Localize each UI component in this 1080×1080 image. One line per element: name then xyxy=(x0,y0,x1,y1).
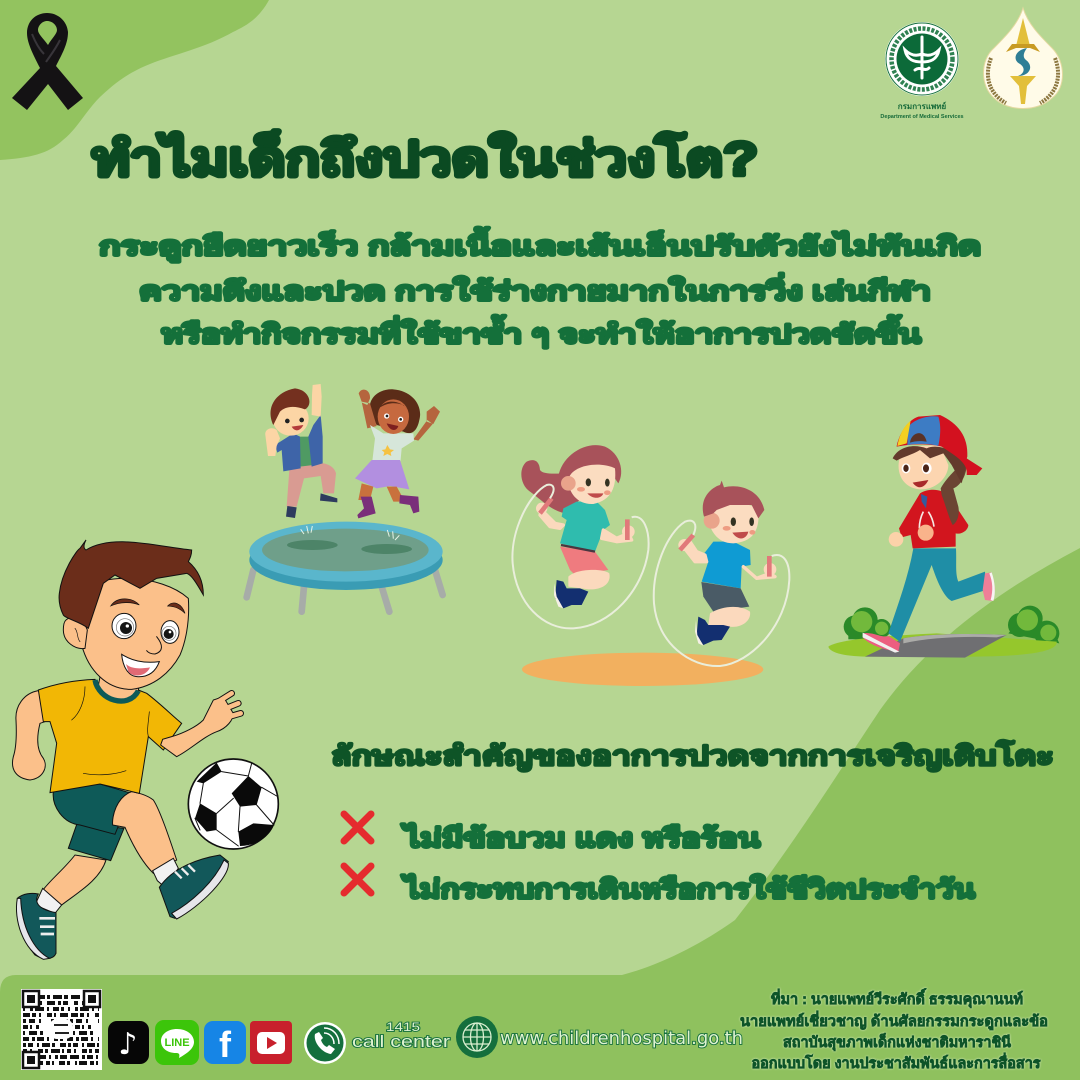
panel: hill and footer band xyxy=(0,548,1080,1080)
back arm xyxy=(12,691,50,780)
icon: globe xyxy=(456,1016,498,1058)
credits block: นายแพทย์เชี่ยวชาญ ด้านศัลยกรรมกระดูกและข้อ xyxy=(740,1010,1048,1030)
yellow shirt xyxy=(38,679,182,793)
call center label: 1415 xyxy=(386,1020,420,1034)
shorts xyxy=(53,784,132,861)
credits block: ออกแบบโดย งานประชาสัมพันธ์และการสื่อสาร xyxy=(752,1052,1041,1072)
icon: LINE: LINE xyxy=(164,1037,190,1049)
icon: red cross xyxy=(344,814,371,841)
icon: red cross xyxy=(344,866,371,893)
list item: no impact on walking xyxy=(344,866,975,904)
front arm with fingers xyxy=(161,693,241,757)
illustration: girl running in park xyxy=(828,415,1059,658)
credits block xyxy=(740,988,1048,1072)
boy with jump rope xyxy=(654,481,789,666)
girl with jump rope xyxy=(512,445,649,628)
icon: LINE xyxy=(155,1020,199,1065)
list item: no swelling: ไม่มีข้อบวม แดง หรือร้อน xyxy=(400,822,760,853)
heading: key characteristics: ลักษณะสำคัญของอาการปวดจากการเจริญเติบโตะ xyxy=(331,739,1054,772)
neck xyxy=(98,677,140,700)
website url: www.childrenhospital.go.th xyxy=(500,1028,743,1049)
illustration: children skipping rope xyxy=(512,445,789,686)
text block: explanation: กระดูกยืดยาวเร็ว กล้ามเนื้อและเส้นเอ็นปรับตัวยังไม่ทันเกิด xyxy=(99,226,981,263)
credits block: สถาบันสุขภาพเด็กแห่งชาติมหาราชินี xyxy=(783,1032,1011,1051)
list item: no swelling xyxy=(344,814,760,853)
text block: explanation: ความตึงและปวด การใช้ร่างกายมากในการวิ่ง เล่นกีฬา xyxy=(139,272,931,306)
icon: Facebook xyxy=(204,1021,246,1065)
call center label xyxy=(352,1020,450,1051)
running girl xyxy=(863,415,995,653)
icon: black mourning ribbon xyxy=(12,13,83,110)
illustration: boy kicking soccer ball xyxy=(12,540,278,959)
park ground and bushes xyxy=(828,606,1059,658)
QR code xyxy=(21,989,102,1070)
logo: Ministry of Public Health: กรมการแพทย์ xyxy=(898,101,947,111)
back leg xyxy=(16,855,106,959)
soccer ball xyxy=(188,759,278,849)
girl on trampoline xyxy=(355,389,440,518)
list item: no impact on walking: ไม่กระทบการเดินหรือการใช้ชีวิตประจำวัน xyxy=(400,873,975,904)
title: ทำไมเด็กถึงปวดในช่วงโต? xyxy=(92,129,758,185)
icon: Facebook: f xyxy=(219,1024,232,1065)
logo: Ministry of Public Health xyxy=(880,22,964,120)
text block: explanation: หรือทำกิจกรรมที่ใช้ขาซ้ำ ๆ จะทำให้อาการปวดชัดขึ้น xyxy=(161,314,921,349)
head xyxy=(59,540,203,689)
illustration: kids jumping on trampoline xyxy=(247,384,443,612)
icon: TikTok: ♪ xyxy=(118,1027,138,1062)
kicking leg xyxy=(113,792,228,919)
text block: explanation xyxy=(99,226,981,349)
boy on trampoline xyxy=(265,384,337,518)
panel: top-left green blob xyxy=(0,0,269,160)
call center label: call center xyxy=(352,1032,450,1051)
icon: YouTube xyxy=(250,1021,292,1064)
icon: phone xyxy=(304,1022,346,1064)
orange ground shadow xyxy=(522,653,763,686)
credits block: ที่มา : นายแพทย์วีระศักดิ์ ธรรมคุณานนท์ xyxy=(771,988,1023,1008)
icon: TikTok xyxy=(108,1021,149,1064)
collar xyxy=(95,680,138,701)
logo: Queen Sirikit hospital teardrop xyxy=(984,8,1062,108)
trampoline xyxy=(247,522,443,612)
logo: Ministry of Public Health: Department of Medical Services xyxy=(880,114,964,120)
